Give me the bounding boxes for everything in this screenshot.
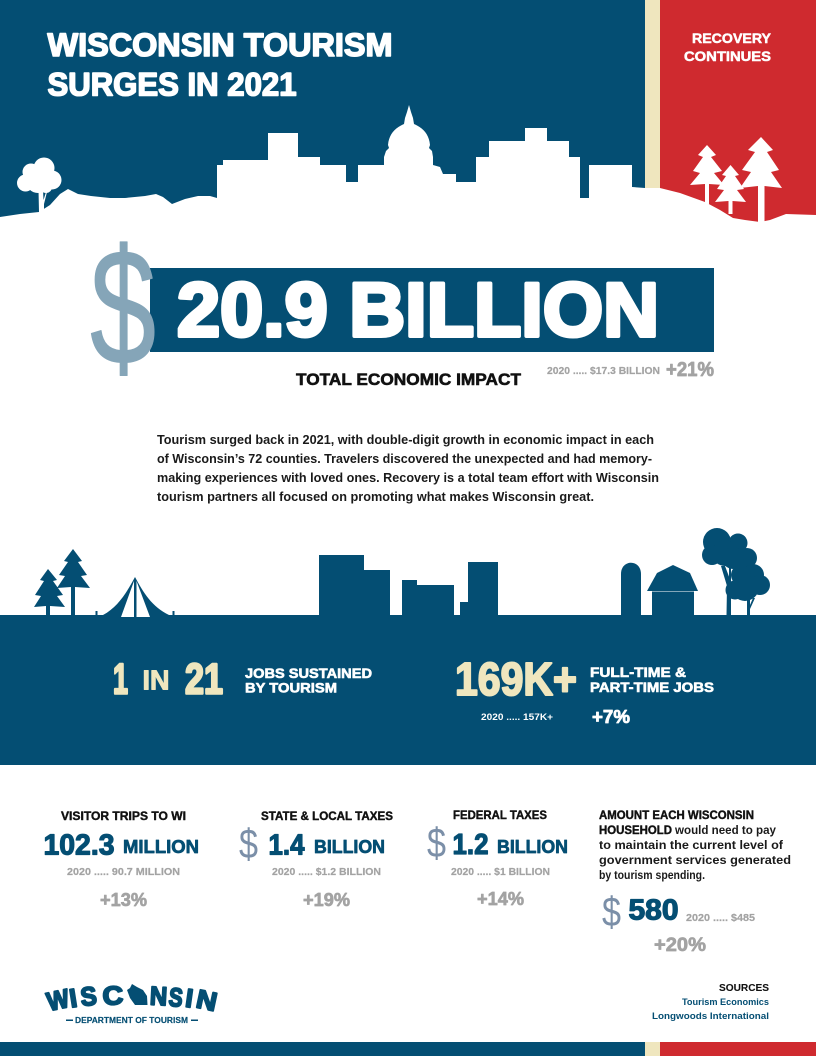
logo: Wisconsin Department of Tourism: DEPARTMENT OF TOURISM (75, 1016, 188, 1025)
panel: federal taxes (427, 810, 568, 909)
2020 comparison: 2020 ..... $17.3 BILLION (547, 366, 660, 377)
panel: visitor trips: MILLION (123, 837, 199, 857)
intro paragraph: tourism partners all focused on promoting what makes Wisconsin great. (157, 490, 594, 504)
sources: Longwoods International (652, 1011, 769, 1022)
intro paragraph: of Wisconsin’s 72 counties. Travelers discovered the unexpected and had memory- (157, 452, 652, 466)
jobs sustained label: BY TOURISM (245, 680, 337, 696)
total economic impact label: TOTAL ECONOMIC IMPACT (296, 371, 521, 389)
small town buildings (319, 555, 498, 615)
panel: visitor trips: 102.3 (44, 830, 114, 862)
panel: state and local taxes (239, 811, 393, 910)
jobs sustained label (245, 666, 372, 696)
panel: state and local taxes: BILLION (314, 837, 385, 857)
logo: Wisconsin Department of Tourism: I (184, 983, 195, 1013)
headline figure: 20.9 BILLION (177, 268, 659, 353)
recovery continues label: RECOVERY (692, 31, 771, 46)
jobs growth: +7% (592, 707, 630, 727)
panel: state and local taxes: 2020 ..... $1.2 BILLION (272, 867, 381, 878)
panel: federal taxes: BILLION (497, 837, 568, 857)
panel: visitor trips: 2020 ..... 90.7 MILLION (67, 867, 180, 878)
panel: household amount: would need to pay (674, 825, 777, 837)
stat: 1 in 21: 21 (185, 656, 223, 704)
logo: Wisconsin Department of Tourism: C (102, 980, 124, 1011)
panel: household amount: by tourism spending. (599, 870, 705, 882)
logo: Wisconsin Department of Tourism: N (194, 984, 220, 1017)
header band (0, 0, 816, 225)
sources: SOURCES (719, 983, 769, 994)
panel: federal taxes: 1.2 (452, 829, 488, 861)
logo: Wisconsin Department of Tourism: S (167, 982, 184, 1012)
2020 comparison: +21% (666, 359, 714, 381)
logo: Wisconsin Department of Tourism: I (67, 983, 79, 1013)
recovery continues label: CONTINUES (684, 49, 771, 64)
logo: Wisconsin Department of Tourism: W (44, 985, 73, 1017)
full-time and part-time label: PART-TIME JOBS (590, 680, 714, 695)
panel: household amount: 580 (628, 894, 678, 926)
full-time and part-time label: FULL-TIME & (590, 665, 686, 680)
intro paragraph: making experiences with loved ones. Recovery is a total team effort with Wisconsin (157, 471, 659, 485)
panel: state and local taxes: +19% (303, 890, 350, 910)
city skyline silhouette (0, 105, 816, 260)
recovery continues label (684, 31, 771, 64)
logo: Wisconsin Department of Tourism: S (79, 982, 98, 1012)
jobs sustained label: JOBS SUSTAINED (245, 666, 372, 681)
panel: household amount: HOUSEHOLD (599, 825, 672, 837)
icon: white pine trees (690, 137, 782, 222)
logo: Wisconsin Department of Tourism (44, 980, 220, 1025)
full-time and part-time label (590, 665, 714, 695)
stat: 1 in 21: IN (142, 664, 170, 696)
panel: federal taxes: +14% (477, 889, 524, 909)
stat: 1 in 21 (113, 656, 223, 704)
icon: blue pine trees (34, 549, 90, 615)
panel: state and local taxes: 1.4 (268, 830, 305, 862)
title (48, 27, 392, 102)
navy jobs band (0, 615, 816, 765)
icon: blue round trees (702, 528, 770, 615)
panel: household amount: to maintain the current level of (599, 840, 783, 852)
panel: federal taxes: $ (427, 819, 446, 866)
panel: state and local taxes: $ (239, 820, 258, 867)
stat: 169K+: 169K+ (455, 653, 577, 705)
sources (652, 983, 769, 1022)
icon: tent (96, 577, 174, 617)
panel: household amount: 2020 ..... $485 (686, 913, 755, 924)
icon: silo and barn (621, 563, 698, 616)
footer band (0, 1042, 816, 1056)
panel: household amount: government services generated (599, 855, 791, 867)
panel: household amount: +20% (654, 935, 706, 956)
stat: 1 in 21: 1 (113, 656, 128, 704)
intro paragraph: Tourism surged back in 2021, with double-digit growth in economic impact in each (157, 433, 654, 447)
jobs 2020 comparison: 2020 ..... 157K+ (481, 712, 553, 723)
big dollar sign: $ (90, 216, 156, 400)
2020 comparison (547, 359, 714, 381)
panel: federal taxes: FEDERAL TAXES (453, 810, 547, 822)
panel: visitor trips: VISITOR TRIPS TO WI (61, 811, 186, 823)
panel: state and local taxes: STATE & LOCAL TAXES (261, 811, 393, 823)
intro paragraph (157, 433, 659, 504)
icon: round tree on hill (17, 158, 62, 212)
big number banner (150, 268, 714, 352)
panel: household amount: AMOUNT EACH WISCONSIN (599, 810, 754, 822)
logo: Wisconsin Department of Tourism: N (149, 982, 168, 1012)
panel: visitor trips (44, 811, 199, 910)
title: WISCONSIN TOURISM (48, 27, 392, 63)
panel: visitor trips: +13% (100, 890, 147, 910)
sources: Tourism Economics (682, 997, 769, 1008)
panel: household amount (599, 810, 791, 956)
title: SURGES IN 2021 (48, 66, 296, 102)
panel: household amount: $ (602, 888, 621, 935)
panel: federal taxes: 2020 ..... $1 BILLION (451, 867, 550, 878)
